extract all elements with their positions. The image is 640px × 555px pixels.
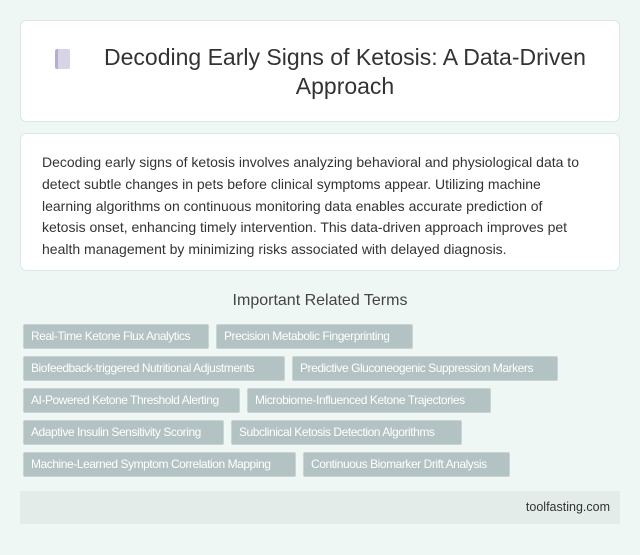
title: Decoding Early Signs of Ketosis: A Data-Driven Approach (104, 44, 586, 99)
tag: Subclinical Ketosis Detection Algorithms (239, 425, 434, 439)
tag: AI-Powered Ketone Threshold Alerting (31, 393, 219, 407)
tag (231, 420, 462, 445)
tag: Biofeedback-triggered Nutritional Adjustments (31, 361, 254, 375)
tag (23, 420, 224, 445)
tag (216, 324, 413, 349)
tag (292, 356, 558, 381)
tag: Continuous Biomarker Drift Analysis (311, 457, 487, 471)
tag: Predictive Gluconeogenic Suppression Markers (300, 361, 533, 375)
tag: Real-Time Ketone Flux Analytics (31, 329, 190, 343)
footer (20, 491, 620, 524)
description card (20, 133, 620, 271)
tag (23, 388, 240, 413)
tag (23, 356, 285, 381)
title card (20, 20, 620, 122)
tag (23, 324, 209, 349)
description text: Decoding early signs of ketosis involves analyzing behavioral and physiological data to detect subtle changes in pets before clinical symptoms appear. Utilizing machine learning algorithms on continuous monitoring data enables accurate prediction of ketosis onset, enhancing timely intervention. This data-driven approach improves pet health management by minimizing risks associated with delayed diagnosis. (42, 154, 579, 257)
tag: Microbiome-Influenced Ketone Trajectories (255, 393, 465, 407)
tag (247, 388, 491, 413)
tag: Precision Metabolic Fingerprinting (224, 329, 389, 343)
tag (303, 452, 510, 477)
tag: Machine-Learned Symptom Correlation Mapping (31, 457, 270, 471)
tag (23, 452, 296, 477)
icon: document (55, 49, 70, 69)
section heading: Important Related Terms (233, 292, 407, 309)
footer: toolfasting.com (526, 500, 610, 514)
tag: Adaptive Insulin Sensitivity Scoring (31, 425, 201, 439)
